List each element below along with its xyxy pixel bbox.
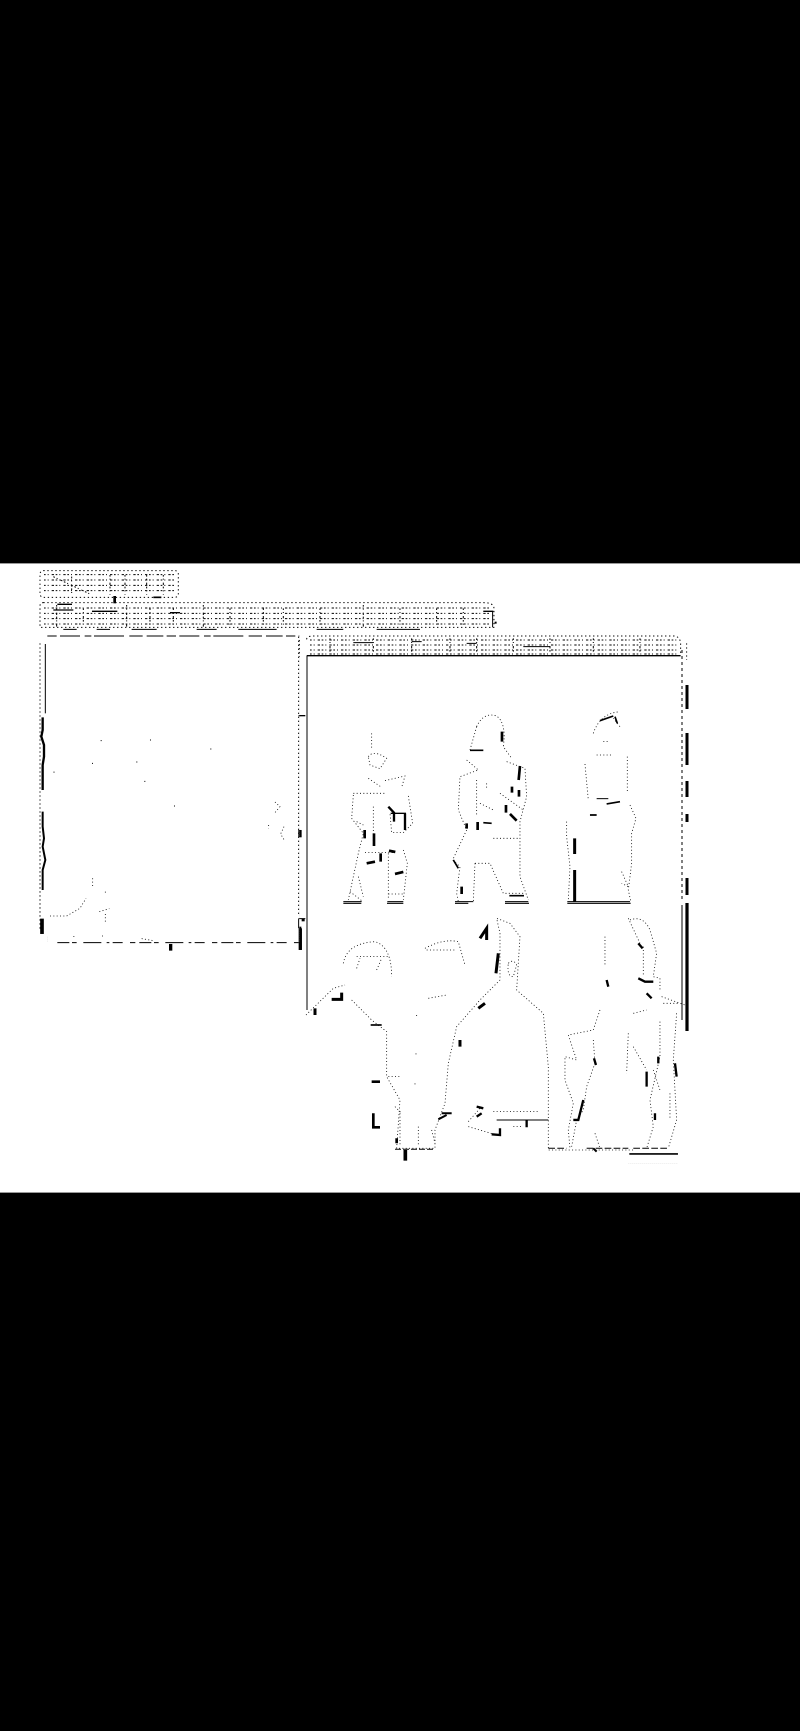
top black band bbox=[0, 0, 800, 563]
panel: left photo frame bbox=[40, 636, 305, 951]
illustration: upper figures bbox=[343, 712, 636, 903]
heading: subtitle outline bbox=[40, 603, 497, 629]
frame lines bbox=[306, 656, 308, 1010]
heading: title outline bbox=[40, 571, 178, 603]
figure: crouching figure with raised arm bbox=[306, 918, 633, 1161]
figure: standing figure with child bbox=[548, 918, 685, 1163]
figure: soldier one bbox=[343, 733, 413, 903]
sparse specks and faint contour bbox=[50, 740, 285, 941]
right edge heavy marks bbox=[686, 685, 688, 895]
panel: right figure frame bbox=[299, 636, 687, 1031]
bottom black band bbox=[0, 1193, 800, 1731]
figure: side-on soldier bbox=[567, 712, 636, 903]
figure: hooded soldier bbox=[453, 715, 529, 903]
subheading outline bbox=[299, 636, 687, 660]
illustration: lower figures bbox=[300, 902, 685, 1163]
figure: object on the ground bbox=[468, 1107, 548, 1135]
